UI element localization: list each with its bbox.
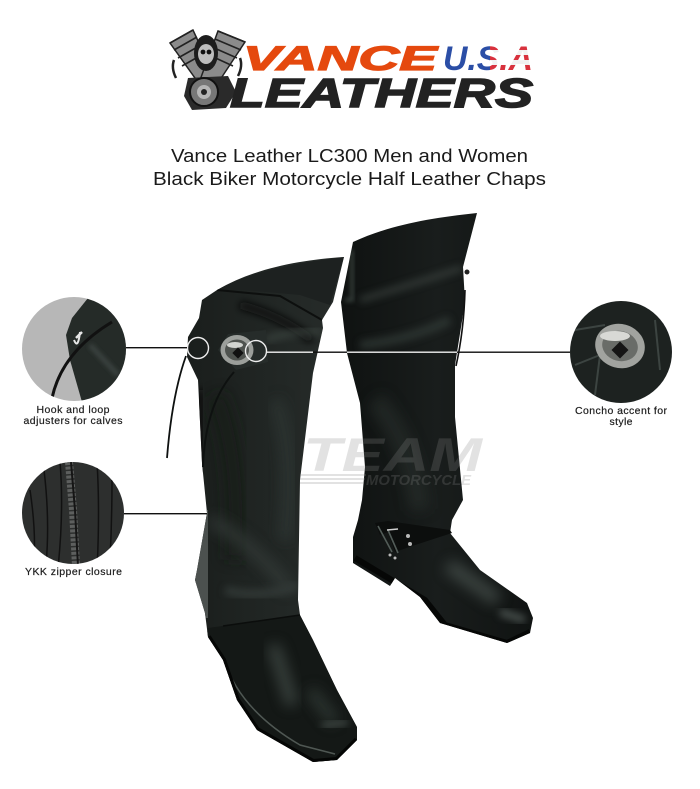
harness strap with studs (375, 521, 452, 560)
detail circle: zipper (22, 462, 124, 564)
caption (575, 405, 668, 428)
watermark: Team Motorcycle: TEAM (303, 428, 483, 481)
logo word: VANCE: VANCE (243, 40, 439, 78)
front laces (167, 356, 186, 458)
concho patch (218, 330, 268, 370)
caption: style (610, 416, 633, 428)
title: Vance Leather LC300 Men and Women (171, 146, 528, 166)
logo: Vance Leathers USA (170, 30, 533, 116)
callout: concho (267, 296, 677, 428)
watermark: Team Motorcycle (300, 428, 483, 489)
side lace (456, 290, 465, 366)
leader line (126, 347, 187, 348)
title (153, 146, 546, 189)
leader line (124, 513, 207, 514)
icon: skull engine (170, 30, 245, 110)
caption: Concho accent for (575, 405, 668, 417)
caption: adjusters for calves (24, 415, 122, 427)
detail circle: hook and loop (22, 297, 126, 401)
leader line (267, 352, 570, 353)
concho (220, 335, 254, 365)
callout: zipper (20, 460, 207, 578)
caption: YKK zipper closure (25, 566, 122, 578)
caption: Hook and loop (36, 404, 110, 416)
callout: hook and loop (20, 295, 187, 427)
detail circle: concho (570, 301, 672, 403)
caption (24, 404, 122, 427)
small white marker rings (188, 338, 266, 362)
title: Black Biker Motorcycle Half Leather Chaps (153, 169, 546, 189)
left boot and chap (167, 257, 357, 770)
logo word: USA: U.S.A (443, 40, 533, 78)
right boot and chap (341, 213, 533, 643)
watermark: Team Motorcycle: MOTORCYCLE (366, 472, 472, 489)
logo word: LEATHERS: LEATHERS (230, 70, 533, 116)
